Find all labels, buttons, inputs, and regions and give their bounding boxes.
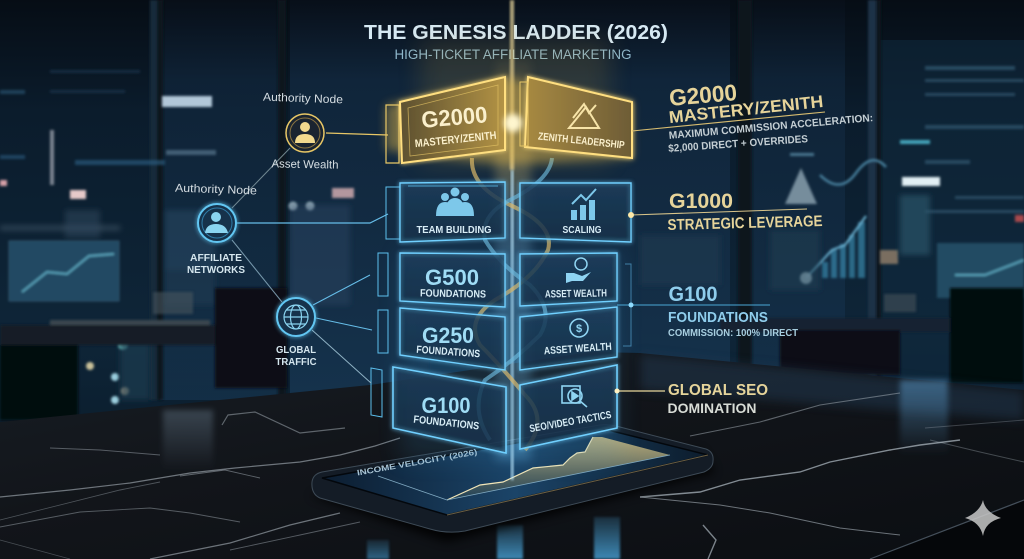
- icon: video search: [562, 386, 587, 407]
- G500 left panel: G500: [425, 265, 479, 290]
- label: global traffic: TRAFFIC: [276, 356, 317, 368]
- subheading: HIGH-TICKET AFFILIATE MARKETING: [394, 47, 632, 62]
- left monitor: [9, 241, 119, 301]
- icon: hand with coin: [566, 258, 591, 283]
- marble veins: [0, 393, 1024, 559]
- callout: G100 foundations: FOUNDATIONS: [668, 309, 768, 326]
- G250 right panel: [520, 307, 617, 370]
- node: authority node blue: [198, 204, 236, 242]
- income chart: [378, 437, 670, 500]
- title: [364, 22, 668, 62]
- callout: global SEO domination: GLOBAL SEO: [668, 382, 768, 399]
- DNA helix: [472, 158, 552, 450]
- blurred city lights and data right: [785, 66, 1024, 284]
- team building panel: TEAM BUILDING: [416, 224, 492, 236]
- icon: blue person: [205, 212, 228, 233]
- G100 left panel: FOUNDATIONS: [413, 414, 480, 432]
- panel: G1000 blue tier: [386, 182, 631, 242]
- G100 right panel: [520, 365, 617, 449]
- icon: globe: [284, 305, 308, 329]
- G500 left panel: [378, 253, 505, 307]
- gold leader line: [632, 112, 825, 131]
- label: affiliate networks: AFFILIATE: [190, 252, 242, 264]
- phone shadow: [310, 450, 715, 542]
- G100 right panel: SEO/VIDEO TACTICS: [529, 409, 612, 435]
- G100 left panel: G100: [422, 393, 470, 418]
- phone with income velocity chart: [310, 425, 715, 542]
- desks and chairs: [0, 288, 1024, 420]
- callout: G1000: [628, 190, 823, 234]
- G250 left panel: FOUNDATIONS: [416, 344, 481, 360]
- G250 right panel: ASSET WEALTH: [543, 341, 612, 357]
- panel: G250 tier: [378, 307, 617, 370]
- marble table: [0, 352, 1024, 559]
- phone body: [312, 425, 713, 532]
- callout: G100 foundations: COMMISSION: 100% DIRECT: [668, 328, 798, 339]
- callout: global SEO domination: [614, 382, 768, 416]
- scaling panel: SCALING: [562, 224, 602, 236]
- label: affiliate networks: NETWORKS: [187, 264, 245, 276]
- callout: G2000: MAXIMUM COMMISSION ACCELERATION:: [668, 112, 874, 142]
- callout: G2000: G2000: [668, 79, 738, 111]
- icon: sparkle watermark: [965, 500, 1001, 536]
- gold glow: [386, 77, 632, 165]
- panel: G500 tier: [378, 253, 617, 307]
- G500 left panel: FOUNDATIONS: [420, 287, 486, 301]
- icon: rising chart: [571, 200, 595, 220]
- callout: G100 foundations: [617, 264, 798, 346]
- right monitor: [937, 243, 1024, 298]
- label: global traffic: [276, 344, 317, 368]
- star flare: [504, 114, 522, 132]
- light reflections on table: [367, 517, 620, 559]
- label: global traffic: GLOBAL: [276, 344, 317, 356]
- left gold panel: MASTERY/ZENITH: [414, 130, 497, 150]
- G500 right panel: ASSET WEALTH: [545, 287, 607, 301]
- icon: team: [436, 188, 474, 216]
- phone screen: [322, 428, 708, 515]
- callout: global SEO domination: DOMINATION: [668, 400, 756, 416]
- scaling panel: [520, 183, 631, 242]
- central light beam: [400, 0, 620, 480]
- right gold panel: ZENITH LEADERSHIP: [537, 131, 625, 152]
- G500 right panel: [520, 253, 617, 306]
- G250 left panel: G250: [422, 323, 474, 348]
- main heading: THE GENESIS LADDER (2026): [364, 22, 668, 44]
- label: asset wealth: Asset Wealth: [271, 158, 339, 172]
- label: authority node top: Authority Node: [263, 92, 343, 106]
- icon: gold person: [295, 122, 315, 143]
- blurred city lights left: [0, 70, 354, 404]
- callout: G1000: STRATEGIC LEVERAGE: [667, 213, 823, 234]
- left gold panel: [386, 77, 505, 163]
- callout: G1000: G1000: [669, 190, 733, 213]
- team building panel: [386, 182, 505, 242]
- panel: G100 tier: [371, 365, 617, 453]
- icon: mountain with arrow: [569, 104, 599, 128]
- callout: G2000: [632, 79, 874, 155]
- window pillars: [150, 0, 881, 400]
- G250 left panel: [378, 308, 505, 370]
- G100 left panel: [371, 367, 506, 453]
- network connector lines: [232, 133, 388, 383]
- chart title: INCOME VELOCITY (2026): [356, 447, 478, 478]
- node: authority node gold: [286, 114, 324, 152]
- node: global traffic: [277, 298, 315, 336]
- callout: G100 foundations: G100: [668, 283, 718, 306]
- label: authority node left: Authority Node: [175, 183, 257, 197]
- callout: G2000: MASTERY/ZENITH: [668, 92, 824, 127]
- callout: G2000: $2,000 DIRECT + OVERRIDES: [668, 133, 808, 155]
- icon: dollar cycle: $: [576, 323, 582, 335]
- blurred bar chart: [822, 222, 865, 278]
- right gold panel: [520, 77, 632, 158]
- panel: G2000 gold tier: [386, 77, 632, 165]
- left gold panel: G2000: [420, 101, 488, 133]
- label: affiliate networks: [187, 252, 245, 276]
